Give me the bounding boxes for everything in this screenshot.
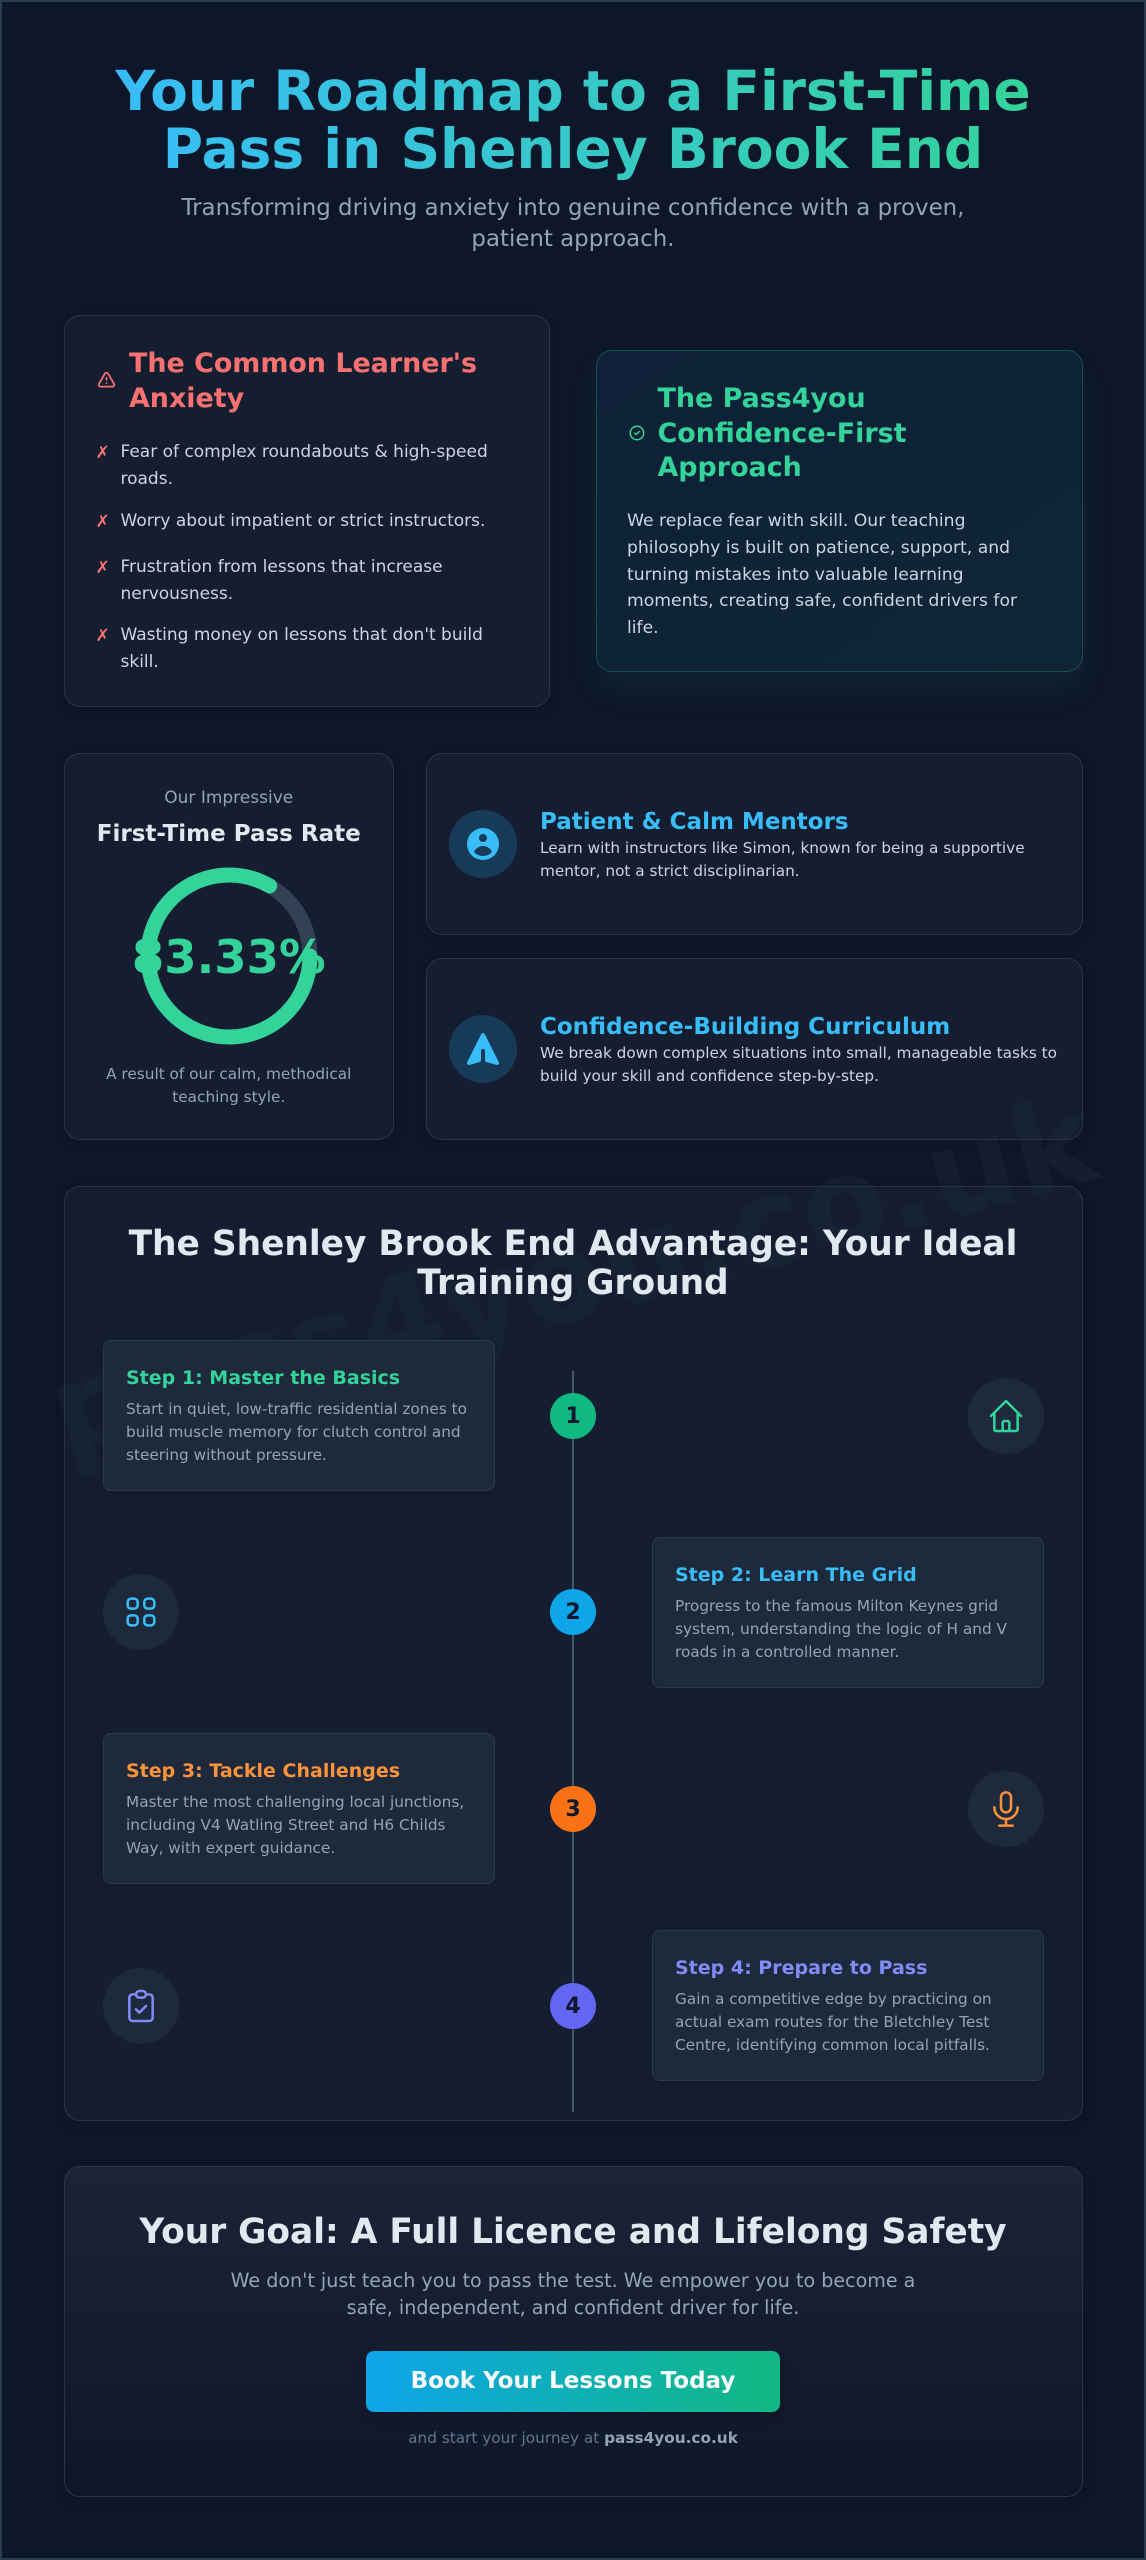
step 3 number xyxy=(550,1786,596,1832)
list item 4 xyxy=(96,625,483,672)
panel: pass rate stat xyxy=(64,753,394,1140)
heading: Patient & Calm Mentors xyxy=(540,809,849,835)
stat heading: First-Time Pass Rate xyxy=(97,821,361,847)
list item 3: ✗ xyxy=(96,558,110,578)
step 2 number xyxy=(550,1589,596,1635)
list item 2: ✗ xyxy=(96,512,110,532)
timeline line xyxy=(572,1371,574,2112)
step 2 text: Progress to the famous Milton Keynes grid xyxy=(675,1597,998,1615)
subtitle: Transforming driving anxiety into genuine confidence with a proven, xyxy=(182,195,964,221)
step 1 text: build muscle memory for clutch control and xyxy=(126,1423,461,1441)
body text: We break down complex situations into small, manageable tasks to xyxy=(540,1044,1057,1062)
body text: safe, independent, and confident driver for life. xyxy=(347,2296,799,2318)
icon: user xyxy=(449,810,517,878)
stat value: 83.33% xyxy=(132,930,326,984)
body text: build your skill and confidence step-by-step. xyxy=(540,1066,879,1084)
button: Book Your Lessons Today xyxy=(411,2368,735,2394)
footer note: and start your journey at pass4you.co.uk xyxy=(408,2429,738,2447)
step 1 title: Step 1: Master the Basics xyxy=(126,1366,400,1388)
title: Your Roadmap to a First-Time xyxy=(115,59,1031,123)
heading xyxy=(658,383,906,483)
step 2 text xyxy=(675,1597,1007,1661)
body text: We don't just teach you to pass the test. We empower you to become a xyxy=(231,2268,915,2292)
panel: your goal xyxy=(64,2166,1082,2497)
heading: Confidence-Building Curriculum xyxy=(540,1014,950,1040)
list item 1: roads. xyxy=(120,469,173,489)
body text: life. xyxy=(627,618,659,638)
list item 3 xyxy=(96,556,443,604)
body text: mentor, not a strict disciplinarian. xyxy=(540,862,800,880)
body text xyxy=(540,838,1025,880)
step 3 text xyxy=(126,1793,464,1857)
step 4 text: Centre, identifying common local pitfalls. xyxy=(675,2036,990,2054)
step 2 card xyxy=(652,1537,1044,1688)
body text: We replace fear with skill. Our teaching xyxy=(627,511,966,531)
caption: teaching style. xyxy=(172,1088,285,1106)
step 2 number: 2 xyxy=(565,1600,581,1625)
step 4 text xyxy=(675,1990,992,2054)
list item 3: nervousness. xyxy=(120,584,233,604)
heading: The Shenley Brook End Advantage: Your Ideal xyxy=(129,1224,1017,1264)
button xyxy=(366,2351,780,2412)
list item 4: ✗ xyxy=(96,626,110,646)
icon: microphone xyxy=(968,1770,1044,1846)
step 3 text: Way, with expert guidance. xyxy=(126,1839,335,1857)
body text: philosophy is built on patience, support, and xyxy=(627,538,1010,558)
icon: clipboard check xyxy=(102,1968,178,2044)
step 3 title: Step 3: Tackle Challenges xyxy=(126,1760,400,1782)
body text: moments, creating safe, confident drivers for xyxy=(627,591,1017,611)
body text xyxy=(540,1044,1057,1084)
icon: warning triangle xyxy=(98,372,116,388)
step 1 card xyxy=(102,1340,494,1491)
list item 4: skill. xyxy=(120,652,159,672)
donut chart xyxy=(140,868,318,1044)
list item 3: Frustration from lessons that increase xyxy=(120,556,443,576)
heading xyxy=(128,1224,1017,1303)
icon: check circle xyxy=(630,426,644,440)
step 2 text: system, understanding the logic of H and V xyxy=(675,1620,1007,1638)
stat label: Our Impressive xyxy=(164,788,293,808)
caption xyxy=(106,1064,351,1106)
step 4 number: 4 xyxy=(565,1994,581,2018)
heading: Anxiety xyxy=(129,383,244,414)
step 1 number xyxy=(550,1392,596,1438)
panel: curriculum xyxy=(426,958,1082,1140)
list item 1 xyxy=(96,442,488,489)
icon: home xyxy=(968,1378,1044,1454)
icon: navigation arrow xyxy=(449,1015,517,1083)
step 2 text: roads in a controlled manner. xyxy=(675,1643,899,1661)
step 4 title: Step 4: Prepare to Pass xyxy=(675,1956,927,1978)
title xyxy=(115,59,1031,181)
heading: Approach xyxy=(658,452,802,483)
panel: confidence-first approach xyxy=(596,350,1082,672)
step 4 number xyxy=(550,1982,596,2028)
caption: A result of our calm, methodical xyxy=(106,1064,351,1082)
step 3 text: Master the most challenging local junctions, xyxy=(126,1793,464,1811)
step 1 text: Start in quiet, low-traffic residential zones to xyxy=(126,1400,467,1418)
step 4 text: actual exam routes for the Bletchley Test xyxy=(675,2013,989,2031)
subtitle xyxy=(181,195,964,252)
step 4 card xyxy=(652,1930,1044,2081)
panel: patient mentors xyxy=(426,753,1082,935)
watermark: pass4you.co.uk xyxy=(35,1068,1111,1485)
body text xyxy=(627,511,1018,638)
step 3 text: including V4 Watling Street and H6 Childs xyxy=(126,1816,446,1834)
step 4 text: Gain a competitive edge by practicing on xyxy=(675,1990,992,2008)
list item 2: Worry about impatient or strict instructors. xyxy=(120,511,485,531)
heading xyxy=(129,348,477,414)
step 3 card xyxy=(102,1733,494,1884)
heading: Your Goal: A Full Licence and Lifelong Safety xyxy=(139,2212,1007,2252)
icon: grid xyxy=(102,1574,178,1650)
body text xyxy=(231,2268,915,2318)
heading: The Pass4you xyxy=(658,383,866,414)
list item 1: Fear of complex roundabouts & high-speed xyxy=(120,442,488,462)
list item 4: Wasting money on lessons that don't build xyxy=(120,625,483,645)
heading: Confidence-First xyxy=(658,418,906,449)
heading: Training Ground xyxy=(417,1263,729,1303)
subtitle: patient approach. xyxy=(471,226,675,252)
list item 1: ✗ xyxy=(96,443,110,463)
body text: Learn with instructors like Simon, known for being a supportive xyxy=(540,838,1025,856)
title: Pass in Shenley Brook End xyxy=(163,117,983,181)
heading: The Common Learner's xyxy=(129,348,477,379)
step 1 text: steering without pressure. xyxy=(126,1446,327,1464)
step 1 text xyxy=(126,1400,467,1464)
body text: turning mistakes into valuable learning xyxy=(627,565,964,585)
step 2 title: Step 2: Learn The Grid xyxy=(675,1564,917,1586)
panel: common learner's anxiety xyxy=(64,315,550,707)
panel: shenley brook end advantage xyxy=(64,1186,1082,2121)
step 3 number: 3 xyxy=(565,1796,581,1822)
step 1 number: 1 xyxy=(565,1404,581,1428)
